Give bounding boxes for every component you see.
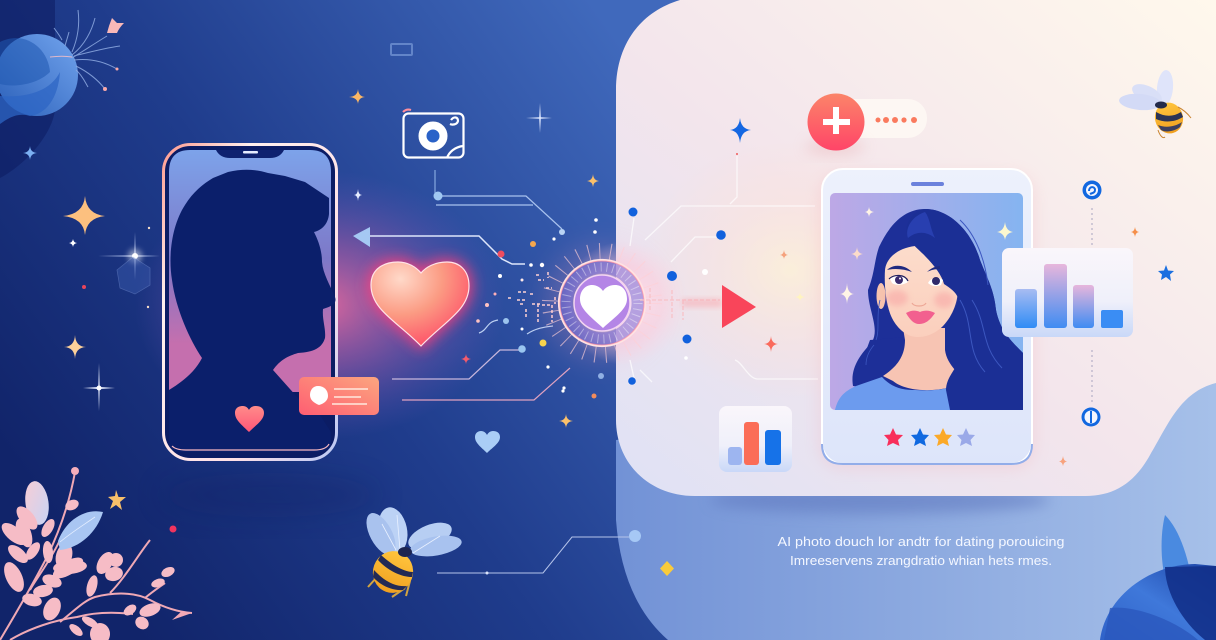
- sparkle: [526, 103, 552, 133]
- rating stars: [884, 428, 975, 446]
- small bar chart card: [719, 406, 792, 472]
- circuit lines and dots right: [628, 156, 818, 385]
- icon: camera: [403, 110, 464, 158]
- brows: [887, 266, 912, 272]
- circuit lines left: [353, 170, 570, 400]
- sparkle red: [764, 336, 778, 352]
- caption text: AI photo douch lor andtr for dating porouicing: [778, 534, 1064, 549]
- caption text: [778, 534, 1064, 568]
- neck: [883, 328, 955, 390]
- eyes: [890, 276, 908, 285]
- yellow diamond: [660, 561, 674, 576]
- small light blue heart: [475, 431, 500, 453]
- big glowing heart: [371, 262, 469, 346]
- lower light blue panel: [616, 370, 1216, 640]
- hair front sweep: [907, 209, 1023, 410]
- phone frame: [164, 144, 336, 460]
- phone screen: [169, 150, 331, 392]
- soft shadow below phone: [160, 473, 380, 517]
- icon: round clock badge: [1082, 180, 1102, 200]
- plus button: [805, 94, 927, 155]
- dotted connector: [1091, 208, 1093, 402]
- bottom right bloom: [1100, 515, 1216, 640]
- small heart: [235, 406, 264, 432]
- pink glow behind phone and heart: [135, 170, 505, 440]
- decoration: top-left orb with rays: [0, 0, 124, 178]
- card shadow: [818, 172, 1036, 470]
- bee bottom left: [360, 505, 463, 599]
- hair back: [852, 209, 1023, 410]
- message bubble: [299, 377, 379, 415]
- phone with silhouette: [164, 144, 379, 460]
- face: [885, 246, 958, 337]
- plant bottom left: [0, 467, 192, 640]
- blush: [886, 290, 908, 306]
- particle dots: [434, 192, 604, 428]
- lips: [906, 311, 935, 324]
- icon: round info badge: [1082, 408, 1100, 426]
- arrow pointing to phone: [353, 227, 370, 247]
- nose: [912, 303, 926, 306]
- sparkles in photo: [840, 207, 1013, 304]
- panel: light result area: [616, 0, 1216, 496]
- shirt: [835, 377, 951, 410]
- sparkle blue: [730, 118, 751, 143]
- floating bar chart card: [1002, 248, 1133, 337]
- dots: [876, 117, 917, 123]
- sparkle: [587, 174, 599, 187]
- glowing central node: [546, 241, 722, 365]
- warm glow: [640, 140, 940, 400]
- silhouette of a man: [169, 170, 336, 452]
- icon: small outlined rectangle: [391, 44, 412, 55]
- shadow under main panel: [710, 486, 1050, 514]
- photo: [830, 193, 1023, 410]
- small sparkles right: [780, 227, 1174, 466]
- phone notch: [216, 150, 284, 158]
- decoration: left sparkles: [23, 89, 365, 532]
- profile card with portrait: [818, 169, 1036, 470]
- lower connector line: [437, 530, 641, 574]
- card body: [822, 169, 1032, 464]
- play arrow: [722, 285, 756, 328]
- bee top right: [1118, 69, 1191, 138]
- caption text: Imreeservens zrangdratio whian hets rmes.: [790, 553, 1052, 568]
